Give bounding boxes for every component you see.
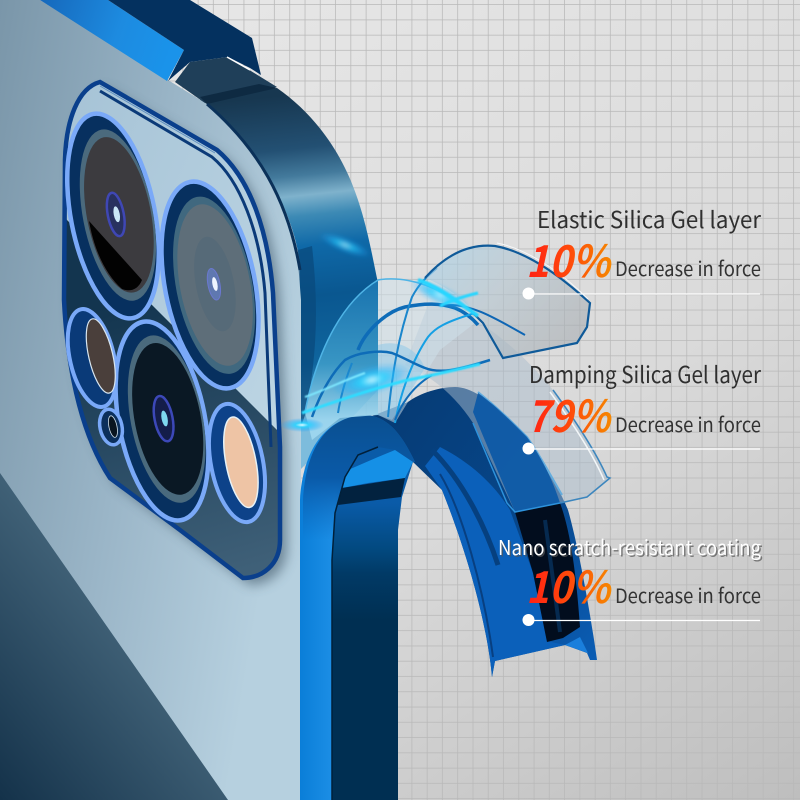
label: damping silica gel layer: 79% xyxy=(527,381,613,445)
inner navy wall xyxy=(332,447,413,800)
label: elastic silica gel layer: Decrease in force xyxy=(615,253,761,282)
label: damping silica gel layer xyxy=(522,356,761,454)
callout line xyxy=(528,448,760,450)
protective arc: main body xyxy=(372,387,597,677)
module chrome outline xyxy=(64,82,280,578)
lower blue panel xyxy=(425,447,565,677)
lens flare xyxy=(280,228,480,500)
flash xyxy=(200,399,274,527)
blue triangle xyxy=(565,637,588,653)
phone frame: curved side xyxy=(198,88,378,470)
arch shading xyxy=(303,415,415,540)
label: nano scratch-resistant coating: Decrease in force xyxy=(615,580,761,609)
callout dot xyxy=(522,614,534,626)
glass layer: elastic silica gel xyxy=(425,243,590,358)
inner edge line xyxy=(332,447,378,800)
label: nano scratch-resistant coating: 10% xyxy=(526,552,613,616)
label: nano scratch-resistant coating xyxy=(498,531,763,626)
callout line xyxy=(528,620,760,622)
interior streak xyxy=(545,520,560,632)
camera module xyxy=(64,82,287,585)
callout dot xyxy=(522,442,534,454)
label: nano scratch-resistant coating: Nano scratch-resistant coating xyxy=(500,532,763,562)
callout dot xyxy=(522,288,534,300)
phone frame top: navy clip xyxy=(108,0,261,81)
rim grooves xyxy=(440,474,493,657)
label: damping silica gel layer: Decrease in force xyxy=(615,409,761,438)
phone frame top: grey-blue joint xyxy=(175,57,277,104)
lens 3 xyxy=(101,314,223,528)
inner bright face xyxy=(342,450,413,488)
label: damping silica gel layer: Damping Silica Gel layer xyxy=(529,356,761,390)
lens 1 xyxy=(52,106,174,326)
label: elastic silica gel layer: Elastic Silica Gel layer xyxy=(537,201,761,235)
inner black band xyxy=(338,478,405,505)
frame column and front arch xyxy=(300,415,415,800)
glass over blue arc xyxy=(473,393,560,512)
glass layer: damping silica gel xyxy=(405,305,610,512)
label: elastic silica gel layer: 10% xyxy=(526,226,613,290)
glass arcs xyxy=(312,268,490,423)
phone back panel xyxy=(0,0,301,800)
lens 2 xyxy=(146,173,274,397)
label: elastic silica gel layer xyxy=(522,201,761,300)
phone frame top: blue strip xyxy=(40,0,184,81)
lens 4 small sensor xyxy=(59,304,125,412)
lower-left shadow triangle xyxy=(0,473,228,800)
bright rim xyxy=(478,392,562,495)
lens 5 microphone xyxy=(96,407,126,447)
callout line xyxy=(528,293,760,295)
module dark lower section xyxy=(64,217,280,578)
glass layer: frame overlay xyxy=(305,279,475,440)
black interior xyxy=(515,503,580,642)
frame dark stripe xyxy=(298,246,316,430)
phone frame edge gloss xyxy=(207,104,300,270)
label: nano scratch-resistant coating: Nano scratch-resistant coating xyxy=(498,531,761,561)
